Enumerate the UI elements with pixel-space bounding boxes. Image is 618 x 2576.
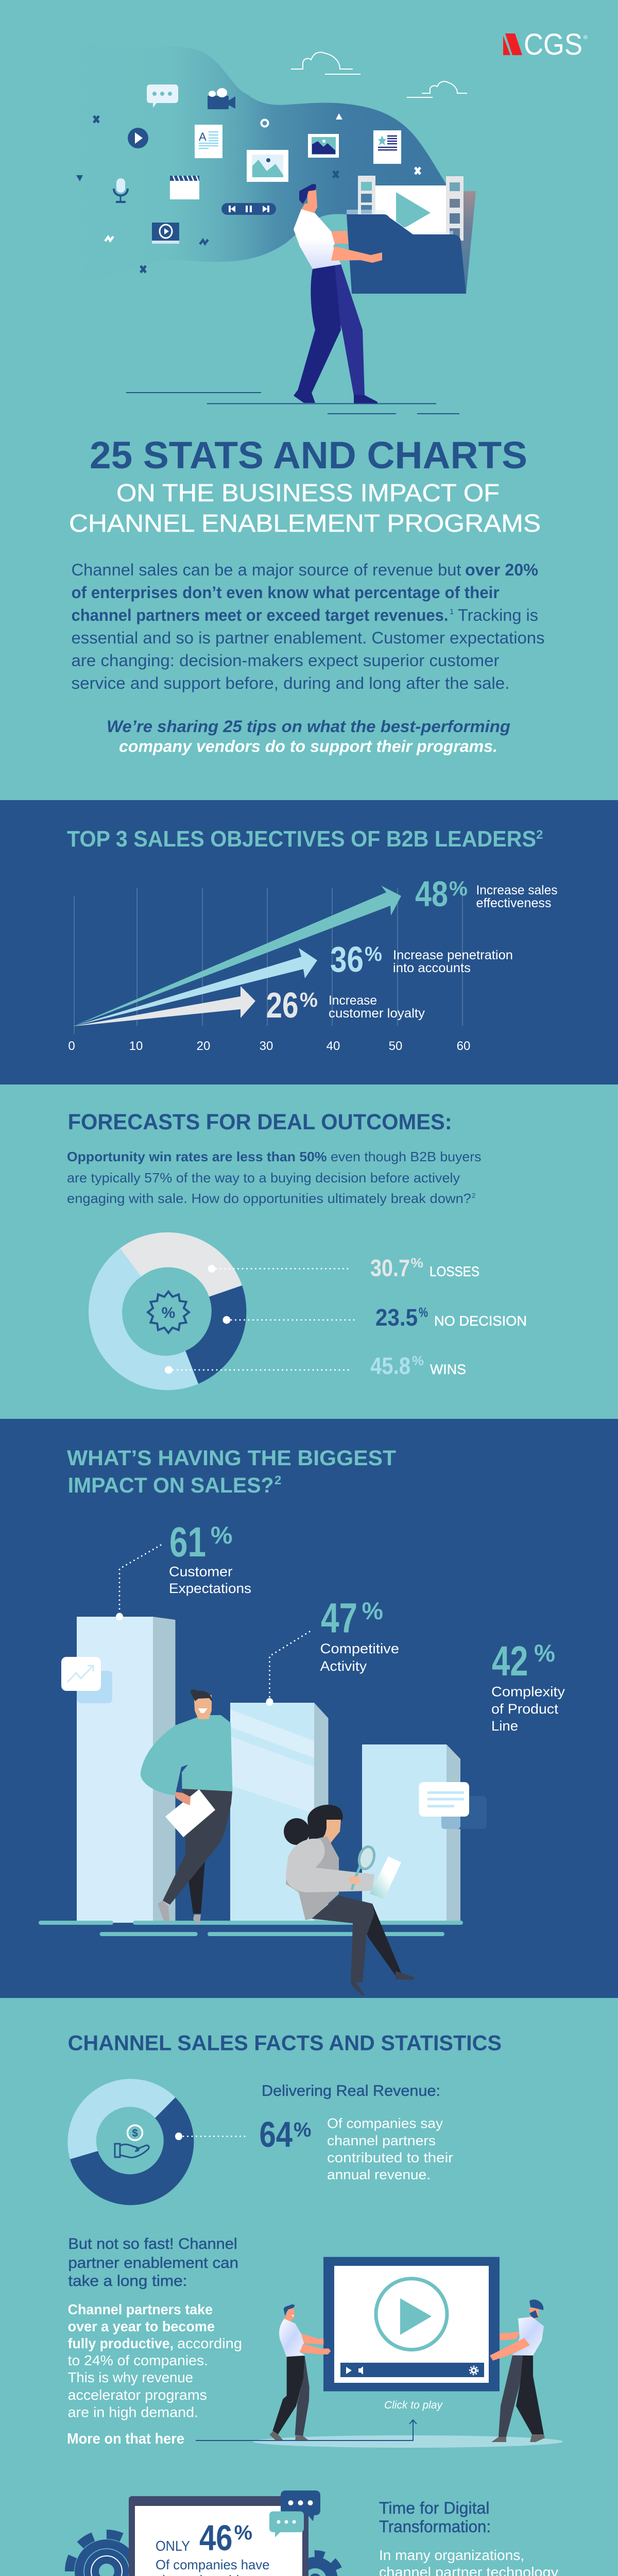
stat: 42 percent: 42 [492,1638,528,1685]
stat: 61 percent: % [211,1521,233,1549]
text block: but not so fast [67,2235,242,2447]
legend: no decision: NO DECISION [434,1313,527,1329]
panel: forecasts for deal outcomes [0,1084,618,1419]
stat: 42 percent [491,1638,565,1734]
panel: hero [0,0,618,800]
stat: 36 percent [330,939,513,979]
stat: 42 percent: of Product [491,1701,559,1717]
icon: media controls [221,203,276,215]
folder with video sheet [347,176,476,294]
text block: time for digital transformation [379,2499,558,2576]
arrow: 26 percent [73,986,255,1026]
stat: 42 percent: Complexity [491,1684,565,1700]
icon: percent badge [148,1292,189,1333]
text block: but not so fast: partner enablement can [68,2255,238,2272]
panel: top 3 sales objectives [0,800,618,1084]
callout: tips [107,717,510,755]
character: right man [490,2299,545,2442]
legend: wins: % [412,1353,424,1368]
intro paragraph [71,561,545,692]
heading: FORECASTS FOR DEAL OUTCOMES: [68,1110,452,1134]
stat: 36 percent: % [365,943,382,965]
stat: 26 percent: Increase [329,993,377,1008]
text block: but not so fast: are in high demand. [68,2404,198,2420]
intro paragraph: Tracking is [458,606,538,624]
heading: 2 [274,1473,281,1487]
arrow: more on that here [196,2420,417,2441]
stat: 47 percent: Competitive [320,1641,399,1656]
text block: time for digital transformation: Transformation: [379,2517,491,2536]
stat: 61 percent: Customer [169,1564,233,1580]
icon: hand with coin: $ [132,2128,138,2139]
arrow chart: 20 [197,1039,210,1053]
heading: 2 [536,828,543,842]
title: ON THE BUSINESS IMPACT OF [116,480,500,507]
text block: time for digital transformation: Time for Digital [379,2499,489,2517]
stat: 46 percent: ONLY [156,2538,190,2554]
icon: percent badge: % [162,1304,175,1321]
stat: delivering real revenue: contributed to their [327,2150,453,2165]
stat: 48 percent: 48 [415,874,448,914]
legend: no decision: % [419,1304,428,1320]
arrow: 36 percent [73,948,317,1026]
stat: 36 percent: 36 [330,939,364,979]
arrow: 48 percent [73,886,401,1026]
text block: but not so fast: take a long time: [68,2273,187,2290]
heading: IMPACT ON SALES? [68,1473,274,1497]
text block: but not so fast: to 24% of companies. [68,2352,208,2368]
stat: 47 percent [266,1595,399,1706]
donut chart: 64 percent [67,2079,194,2205]
character: woman with magnifier [284,1805,415,1996]
stat: 47 percent: Activity [320,1658,367,1674]
text block: but not so fast: accelerator programs [68,2387,207,2403]
legend: no decision [222,1304,527,1331]
stat: 36 percent: Increase penetration [393,948,513,962]
bar: customer expectations [77,1617,175,1923]
icon: speech bubble [147,84,178,108]
intro paragraph: service and support before, during and long after the sale. [71,674,510,692]
illustration: video player with two men [196,2257,563,2448]
stat: 26 percent: customer loyalty [329,1006,425,1021]
icon: gears [70,2534,368,2576]
stat: delivering real revenue: Of companies say [327,2116,443,2131]
bar: competitive activity [230,1703,329,1923]
stat: 61 percent [116,1519,251,1621]
stat: delivering real revenue: 64 [260,2114,293,2155]
stat: 36 percent: into accounts [393,961,471,975]
text block: but not so fast: over a year to become [68,2318,215,2334]
ground lines [39,1921,463,1936]
legend: wins [165,1352,466,1379]
intro text: even though B2B buyers [331,1149,481,1164]
ground lines [126,393,459,414]
intro text: are typically 57% of the way to a buying decision before actively [67,1170,460,1185]
icon: video camera [208,88,235,109]
arrow chart: 30 [260,1039,273,1053]
stat: delivering real revenue: annual revenue. [327,2167,431,2182]
legend: no decision: 23.5 [375,1304,418,1331]
stat: delivering real revenue: channel partners [327,2133,436,2148]
legend: losses [208,1255,479,1281]
character: left man [269,2304,331,2441]
stat: 42 percent: Line [491,1718,518,1734]
legend: losses: % [411,1255,423,1270]
text block: but not so fast: But not so fast! Channel [68,2235,237,2252]
heading: CHANNEL SALES FACTS AND STATISTICS [68,2031,502,2055]
stat: 42 percent: % [534,1639,555,1667]
intro paragraph: 1 [450,607,454,616]
intro paragraph: over 20% [465,561,538,579]
title: 25 STATS AND CHARTS [90,434,527,477]
legend: wins: 45.8 [370,1352,410,1379]
text block: but not so fast: fully productive, [68,2335,174,2351]
arrow chart: 40 [327,1039,340,1053]
stat: 48 percent: % [449,877,468,900]
logo: CGS: CGS [524,28,582,61]
icon: clapperboard [170,176,199,199]
background blob [72,41,456,291]
icon: microphone [114,178,128,203]
illustration: laptop with gears [13,2490,427,2576]
arrow chart: 50 [389,1039,402,1053]
intro text: 2 [472,1192,475,1199]
heading: WHAT’S HAVING THE BIGGEST [67,1446,396,1470]
text block: but not so fast: Channel partners take [68,2301,213,2317]
legend: wins: WINS [430,1362,466,1377]
title: CHANNEL ENABLEMENT PROGRAMS [69,510,541,537]
icon: document with star [373,130,401,164]
intro paragraph: of enterprises don’t even know what percentage of their [71,583,500,602]
stat: 26 percent: 26 [266,985,299,1025]
intro text [67,1149,481,1206]
stat: 48 percent [415,874,557,914]
donut chart [89,1232,246,1390]
arrow chart: 60 [457,1039,470,1053]
stat: 61 percent: Expectations [169,1581,251,1596]
icon: small image [308,134,339,158]
title [69,434,541,537]
icon: video tile [152,223,179,244]
icon: clouds [291,52,467,97]
character: man carrying folder [294,184,382,403]
bar: complexity of product line [362,1744,460,1923]
icon: play button [128,128,148,148]
stat: delivering real revenue: Delivering Real Revenue: [262,2082,440,2099]
text block: time for digital transformation: In many organizations, [379,2547,524,2563]
icon: cross marks and squiggles [76,113,420,273]
logo: CGS: ® [583,35,588,41]
text block: but not so fast: This is why revenue [68,2369,193,2385]
stat: 46 percent: % [234,2521,252,2544]
character: man with paper [141,1689,233,1923]
panel: channel sales facts [0,1998,618,2576]
stat: delivering real revenue: % [294,2119,311,2141]
callout: tips: We’re sharing 25 tips on what the best-performing [107,717,510,736]
icon: document with letter: A [199,130,207,143]
text block: but not so fast: More on that here [67,2431,184,2447]
arrow chart: 10 [129,1039,143,1053]
text block: but not so fast: according [177,2335,242,2351]
stat: 47 percent: 47 [321,1595,357,1642]
video frame [323,2257,500,2392]
intro paragraph: are changing: decision-makers expect superior customer [71,651,500,670]
icon: chat bubbles [269,2490,320,2537]
stat: 48 percent: Increase sales [476,883,557,897]
arrow chart [68,874,557,1053]
stat: delivering real revenue [175,2082,453,2182]
label: click to play: Click to play [384,2399,443,2411]
intro text: Opportunity win rates are less than 50% [67,1149,327,1164]
stat: 26 percent: % [300,989,318,1011]
icon: message card [419,1782,487,1829]
icon: hand with coin [115,2125,149,2158]
stat: 46 percent [156,2518,277,2576]
laptop [99,2496,337,2576]
stat: 46 percent: Of companies have [156,2557,270,2572]
heading [67,1446,396,1497]
intro paragraph: Channel sales can be a major source of revenue but [71,561,461,579]
legend: losses: 30.7 [370,1255,410,1281]
legend: losses: LOSSES [430,1264,479,1279]
stat: 46 percent: 46 [199,2518,233,2558]
arrow chart: 0 [68,1039,75,1053]
panel: biggest impact on sales [0,1419,618,1998]
intro paragraph: essential and so is partner enablement. Customer expectations [71,629,545,647]
icon: chart card [61,1657,112,1703]
stat: 61 percent: 61 [169,1519,206,1566]
intro paragraph: channel partners meet or exceed target revenues. [71,606,448,624]
stat: 26 percent [266,985,425,1025]
stat: 47 percent: % [362,1597,383,1624]
icon: large image [247,150,288,182]
intro text: engaging with sale. How do opportunities ultimately break down? [67,1191,471,1206]
heading: TOP 3 SALES OBJECTIVES OF B2B LEADERS [67,826,536,852]
callout: tips: company vendors do to support their programs. [119,737,497,755]
stat: 48 percent: effectiveness [476,896,551,910]
icon: document with letter [195,125,222,158]
